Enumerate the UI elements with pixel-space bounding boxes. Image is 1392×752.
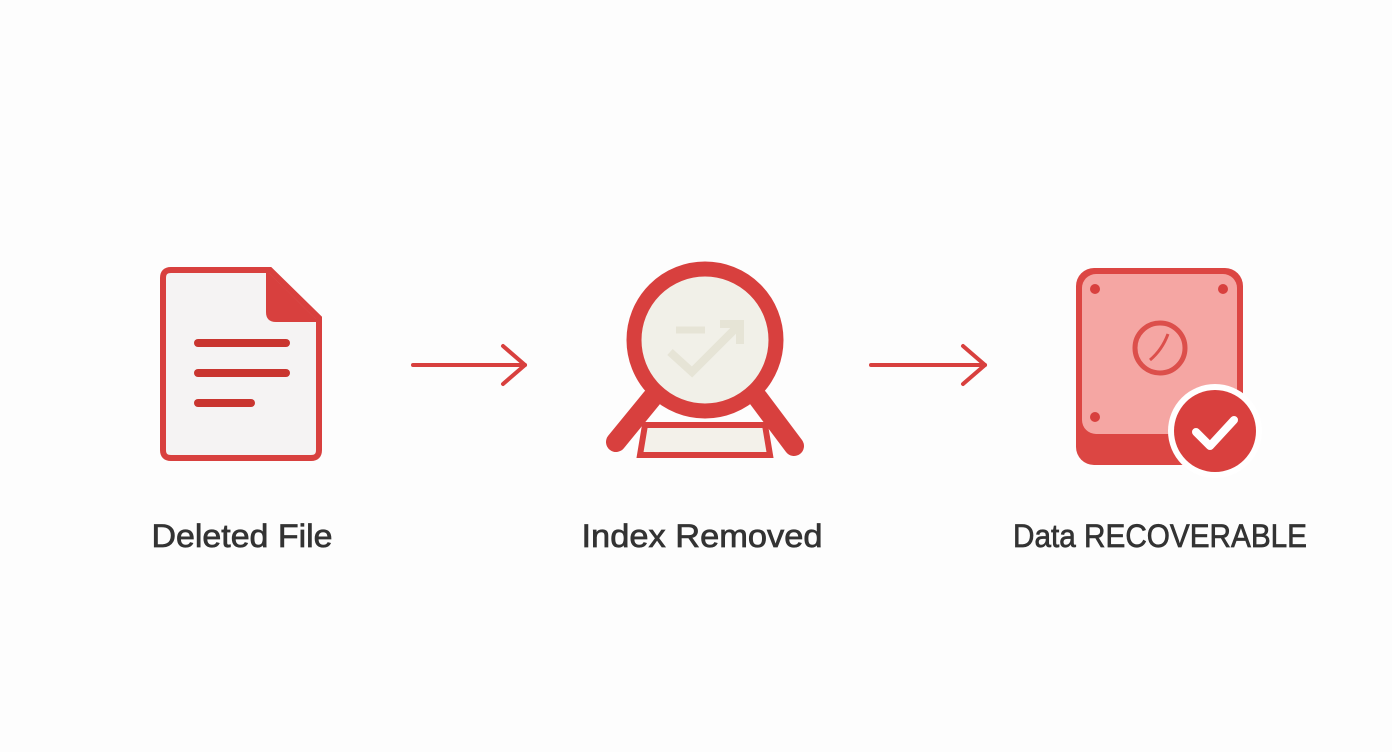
icon: hard drive recoverable (1076, 268, 1262, 478)
label: data recoverable: Data RECOVERABLE (1013, 518, 1307, 554)
label: index removed: Index Removed (582, 518, 822, 554)
arrow 1 (413, 346, 525, 384)
arrow 2 (871, 346, 985, 384)
icon: magnifier index removed (616, 269, 794, 455)
icon: deleted file (163, 270, 319, 458)
label: deleted file: Deleted File (152, 518, 332, 554)
